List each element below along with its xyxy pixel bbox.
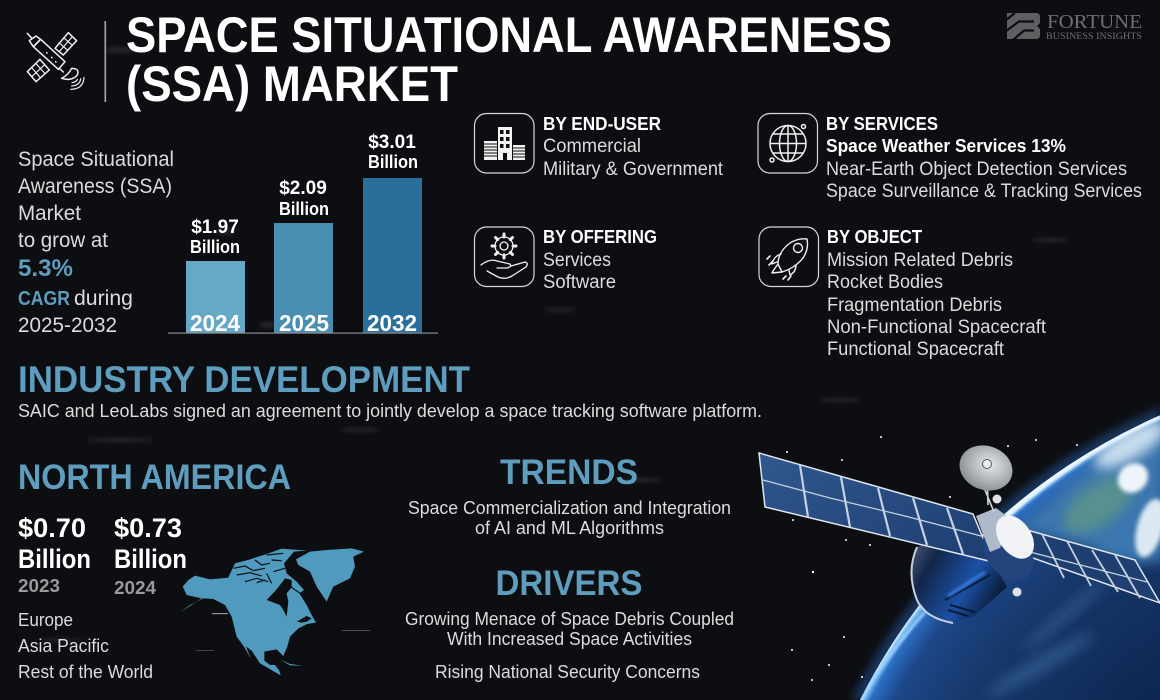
panel: by object: Fragmentation Debris [827,295,1002,316]
bar 2024 [186,217,245,336]
panel: by object [759,227,1047,360]
divider [104,21,106,102]
satellite rear cylinder [910,535,1007,623]
image: earth and stars [786,407,1160,700]
image: satellite [759,438,1160,623]
value 2024 [114,513,187,598]
panel: drivers: With Increased Space Activities [447,629,692,649]
bar chart [168,132,438,336]
logo: Fortune Business Insights [1006,11,1142,41]
title [126,7,892,112]
industry development: SAIC and LeoLabs signed an agreement to jointly develop a space tracking software platform. [18,400,762,421]
panel: trends: Space Commercialization and Integration [408,498,731,518]
value 2024: Billion [114,544,187,574]
panel: by object: BY OBJECT [827,227,922,247]
panel: by object: Mission Related Debris [827,250,1013,271]
panel: drivers: Growing Menace of Space Debris Coupled [405,609,734,629]
other regions list: Rest of the World [18,662,153,682]
panel: by services [758,114,1142,202]
market growth text: CAGR [18,288,70,310]
industry development: INDUSTRY DEVELOPMENT [18,359,470,400]
satellite dish [953,438,1019,512]
bar 2032: Billion [368,152,418,172]
bar 2025 [274,178,333,336]
panel: by services: Space Weather Services 13% [826,136,1066,156]
bar 2024: 2024 [190,310,240,336]
panel: north america [18,458,291,682]
bar 2025: Billion [279,199,329,219]
icon: gear and hand [474,227,534,286]
other regions list: Asia Pacific [18,636,109,656]
panel: by object: Rocket Bodies [827,272,943,293]
value 2024: 2024 [114,578,156,598]
value 2023 [18,513,91,596]
panel: drivers [405,564,734,682]
market growth text: to grow at [18,229,108,252]
icon: buildings [474,114,534,173]
panel: by offering [474,227,657,293]
panel: by object: Functional Spacecraft [827,339,1005,360]
bar 2024: $1.97 [191,217,239,238]
header icon: satellite [27,33,84,89]
panel: by offering: Services [543,250,611,271]
right solar panel [1027,530,1160,603]
panel: by end-user: Military & Government [543,159,724,180]
panel: trends: of AI and ML Algorithms [475,518,664,538]
value 2023: $0.70 [18,513,86,543]
satellite bus and white disc [972,494,1044,596]
panel: by services: Near-Earth Object Detection Services [826,159,1127,180]
other regions list: Europe [18,610,73,630]
bar 2032 [363,132,422,336]
industry development [18,359,762,421]
icon: rocket [759,227,818,286]
panel: by end-user: BY END-USER [543,114,661,134]
logo mark [1006,13,1040,40]
market growth text: 5.3% [18,255,73,282]
panel: by offering: Software [543,272,616,293]
logo: Fortune Business Insights: FORTUNE [1047,11,1142,33]
title: (SSA) MARKET [126,56,458,112]
market growth text: Awareness (SSA) [18,175,172,198]
icon: globe [758,114,818,173]
market growth text: Market [18,202,81,225]
bar 2032: $3.01 [368,132,416,153]
title: SPACE SITUATIONAL AWARENESS [126,7,892,63]
map: north america [180,548,364,675]
panel: by services: Space Surveillance & Tracking Services [826,181,1142,202]
market growth text: Space Situational [18,148,174,171]
panel: by end-user: Commercial [543,136,641,157]
panel: north america: NORTH AMERICA [18,458,291,497]
panel: trends: TRENDS [500,453,638,492]
bar 2024: Billion [190,237,240,257]
panel: drivers: Rising National Security Concerns [435,662,700,682]
value 2023: 2023 [18,576,60,596]
panel: by offering: BY OFFERING [543,227,657,247]
left solar panel [759,453,993,562]
panel: trends [408,453,731,538]
panel: by end-user [474,114,724,180]
market growth text [18,148,174,337]
market growth text: during [74,287,133,310]
other regions list [18,610,153,682]
market growth text: 2025-2032 [18,314,117,337]
panel: by object: Non-Functional Spacecraft [827,317,1047,338]
value 2023: Billion [18,544,91,574]
bar 2025: $2.09 [279,178,327,199]
panel: by services: BY SERVICES [826,114,938,134]
value 2024: $0.73 [114,513,182,543]
bar 2032: 2032 [367,310,417,336]
logo: Fortune Business Insights: BUSINESS INSIGHTS [1046,31,1142,41]
panel: drivers: DRIVERS [496,564,642,603]
bar 2025: 2025 [279,310,329,336]
